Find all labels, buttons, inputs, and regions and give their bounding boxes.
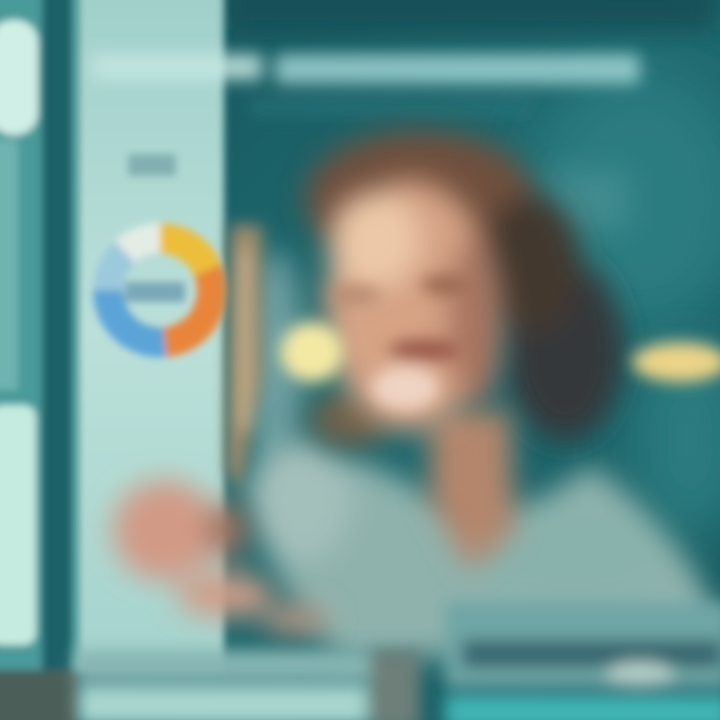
panel: far-left window xyxy=(0,0,80,720)
donut chart xyxy=(108,238,212,342)
panel: light chart panel xyxy=(78,0,224,670)
small panel label xyxy=(128,154,176,176)
person: face xyxy=(325,180,503,430)
bottom right dashboard xyxy=(445,602,720,720)
donut centre xyxy=(125,282,185,302)
title bar xyxy=(92,54,640,114)
glow: right light xyxy=(632,342,720,382)
faint notes on right xyxy=(550,170,630,230)
pencil xyxy=(226,225,262,490)
person: hair xyxy=(305,130,623,446)
person: eyes and smile xyxy=(329,275,469,410)
bottom left bar xyxy=(75,650,420,720)
glow: left light xyxy=(280,322,344,382)
person: shirt xyxy=(245,440,710,660)
hand xyxy=(113,480,329,634)
person: neck xyxy=(430,410,515,570)
